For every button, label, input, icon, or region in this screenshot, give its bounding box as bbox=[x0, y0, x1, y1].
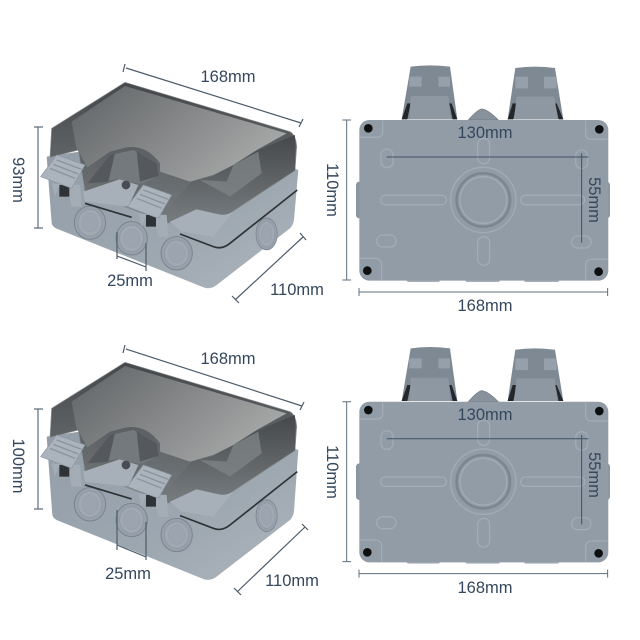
dimension: 168mm width line bbox=[123, 345, 304, 410]
dimension: 93mm height line bbox=[34, 127, 43, 228]
back illustration with dimension lines bbox=[342, 347, 610, 578]
label: 130mm: 130mm bbox=[457, 124, 513, 142]
box illustration bbox=[41, 362, 298, 580]
label: 93mm: 93mm bbox=[9, 157, 27, 203]
panel: bottom-right box back view bbox=[323, 347, 610, 597]
label: 110mm height: 110mm bbox=[323, 163, 341, 217]
back illustration with dimension lines bbox=[342, 65, 610, 296]
label: 25mm: 25mm bbox=[105, 565, 151, 583]
panel: top-right box back view bbox=[323, 65, 610, 315]
box illustration bbox=[41, 82, 298, 288]
label: 100mm: 100mm bbox=[9, 438, 27, 494]
label: 168mm width: 168mm bbox=[457, 579, 513, 597]
panel: top-left box perspective view bbox=[9, 64, 324, 303]
label: 168mm width: 168mm bbox=[457, 297, 513, 315]
label: 130mm: 130mm bbox=[457, 406, 513, 424]
label: 110mm height: 110mm bbox=[323, 445, 341, 499]
panel: bottom-left box perspective view bbox=[9, 345, 319, 595]
label: 110mm: 110mm bbox=[265, 572, 319, 590]
label: 25mm: 25mm bbox=[107, 272, 153, 290]
dimension: 25mm gland line bbox=[117, 232, 146, 271]
label: 55mm: 55mm bbox=[585, 452, 603, 498]
label: 168mm: 168mm bbox=[200, 350, 256, 368]
dimension: 110mm depth line bbox=[234, 524, 308, 595]
label: 168mm: 168mm bbox=[200, 68, 256, 86]
label: 110mm: 110mm bbox=[270, 281, 324, 299]
dimension: 25mm gland line bbox=[117, 510, 146, 560]
label: 55mm: 55mm bbox=[585, 177, 603, 223]
dimension: 100mm height line bbox=[34, 409, 43, 509]
dimension: 110mm depth line bbox=[232, 233, 306, 303]
dimension: 168mm width line bbox=[123, 64, 303, 127]
